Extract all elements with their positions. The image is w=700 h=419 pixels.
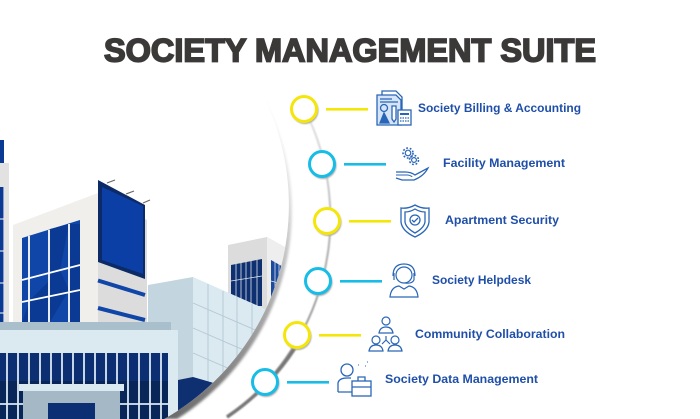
building illustration (0, 140, 290, 419)
icon: hand and gears (396, 148, 428, 180)
node (284, 322, 312, 350)
icon: person with briefcase (338, 362, 371, 396)
icon: documents and calculator (377, 91, 411, 125)
label: Community Collaboration (415, 329, 565, 341)
connector (319, 334, 361, 337)
icon: three people (369, 317, 402, 351)
label: Society Helpdesk (432, 275, 532, 287)
item: Society Data Management (252, 362, 538, 397)
label: Society Billing & Accounting (418, 103, 581, 115)
item: Community Collaboration (284, 317, 565, 351)
item: Society Billing & Accounting (292, 91, 581, 125)
item: Facility Management (310, 148, 565, 180)
item: Society Helpdesk (306, 264, 532, 297)
circle shadow (0, 0, 292, 419)
label: Apartment Security (445, 215, 560, 227)
label: Society Data Management (385, 374, 538, 386)
billboard (98, 180, 150, 320)
node (314, 208, 342, 236)
mid building (13, 193, 147, 322)
back building (228, 237, 285, 309)
label: Facility Management (443, 158, 565, 170)
item: Apartment Security (314, 205, 560, 237)
icon: headset agent (390, 264, 418, 297)
connector arc (227, 112, 330, 417)
connector (344, 163, 386, 166)
connector (349, 220, 391, 223)
title: SOCIETY MANAGEMENT SUITE (104, 32, 596, 68)
connector (326, 108, 368, 111)
node (292, 96, 318, 124)
connector (287, 381, 329, 384)
node (310, 152, 336, 179)
front building (0, 322, 178, 419)
left tower (0, 140, 9, 323)
white circle (0, 0, 289, 419)
icon: shield (401, 205, 429, 237)
node (252, 370, 280, 397)
node (306, 268, 332, 296)
connector (340, 280, 382, 283)
glass building (148, 277, 266, 410)
